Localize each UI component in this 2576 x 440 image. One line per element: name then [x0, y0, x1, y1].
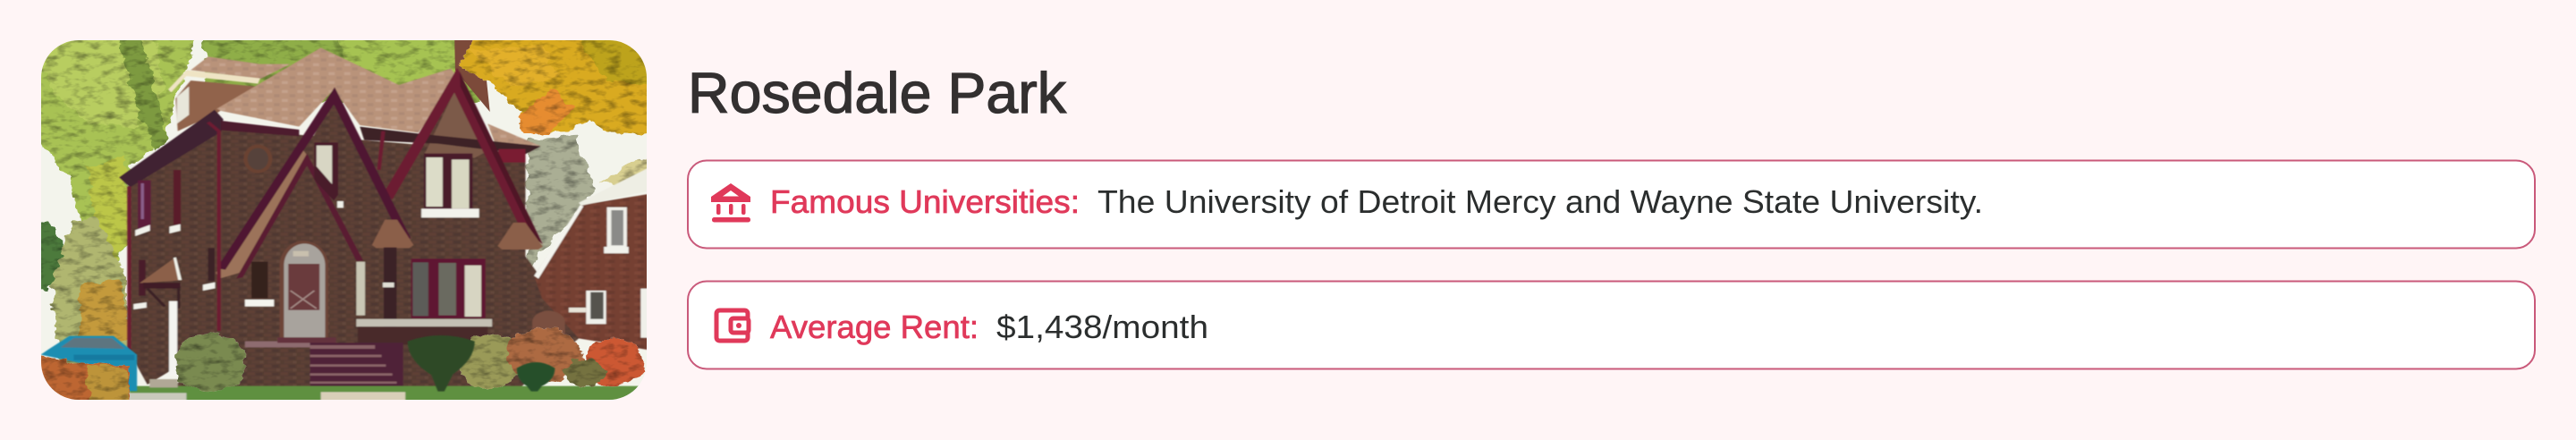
gable right trim	[385, 68, 543, 244]
title: Rosedale Park	[688, 61, 1067, 125]
value: rent: $1,438/month	[996, 309, 1208, 345]
lower bay window	[356, 258, 486, 318]
autumn tree top right	[460, 18, 679, 136]
downspouts	[129, 123, 383, 353]
value: universities: The University of Detroit Mercy and Wayne State University.	[1097, 183, 1983, 220]
main roof	[216, 47, 458, 132]
icon: university building	[711, 183, 750, 222]
gable fills	[236, 87, 521, 277]
panel: house photo	[41, 40, 647, 400]
clipped evergreen shrubs	[408, 335, 555, 392]
lower left window	[245, 262, 274, 307]
autumn hedge	[26, 353, 129, 409]
shrubs	[174, 328, 645, 392]
chimney	[454, 30, 490, 112]
round window	[243, 145, 272, 173]
right house	[532, 167, 650, 351]
label: famous universities: Famous Universities:	[770, 183, 1080, 220]
front door	[280, 241, 328, 338]
steps	[310, 343, 403, 391]
icon: wallet	[716, 310, 749, 341]
window gable centre	[314, 142, 343, 207]
grass and walkway	[126, 379, 650, 404]
side door	[169, 301, 177, 376]
gable half timber	[425, 89, 486, 158]
side porch roof	[140, 258, 182, 309]
label: average rent: Average Rent:	[770, 309, 979, 345]
porch wall	[245, 337, 336, 389]
side windows	[133, 170, 215, 309]
gable caps	[372, 220, 543, 343]
background trees	[0, 0, 659, 396]
gable centre trim	[216, 87, 411, 270]
porch rail	[356, 319, 492, 344]
cupola	[168, 56, 291, 131]
whole building group	[119, 47, 650, 404]
inner gable trim	[236, 154, 363, 279]
front wall	[174, 128, 579, 387]
photo sky	[0, 0, 680, 440]
panel: famous universities	[688, 161, 2535, 249]
side wall	[129, 132, 222, 385]
panel: average rent	[688, 281, 2535, 368]
gable centre roof slope	[216, 146, 307, 279]
eaves	[119, 110, 224, 187]
blue car	[41, 336, 137, 391]
window gable right	[421, 154, 479, 217]
